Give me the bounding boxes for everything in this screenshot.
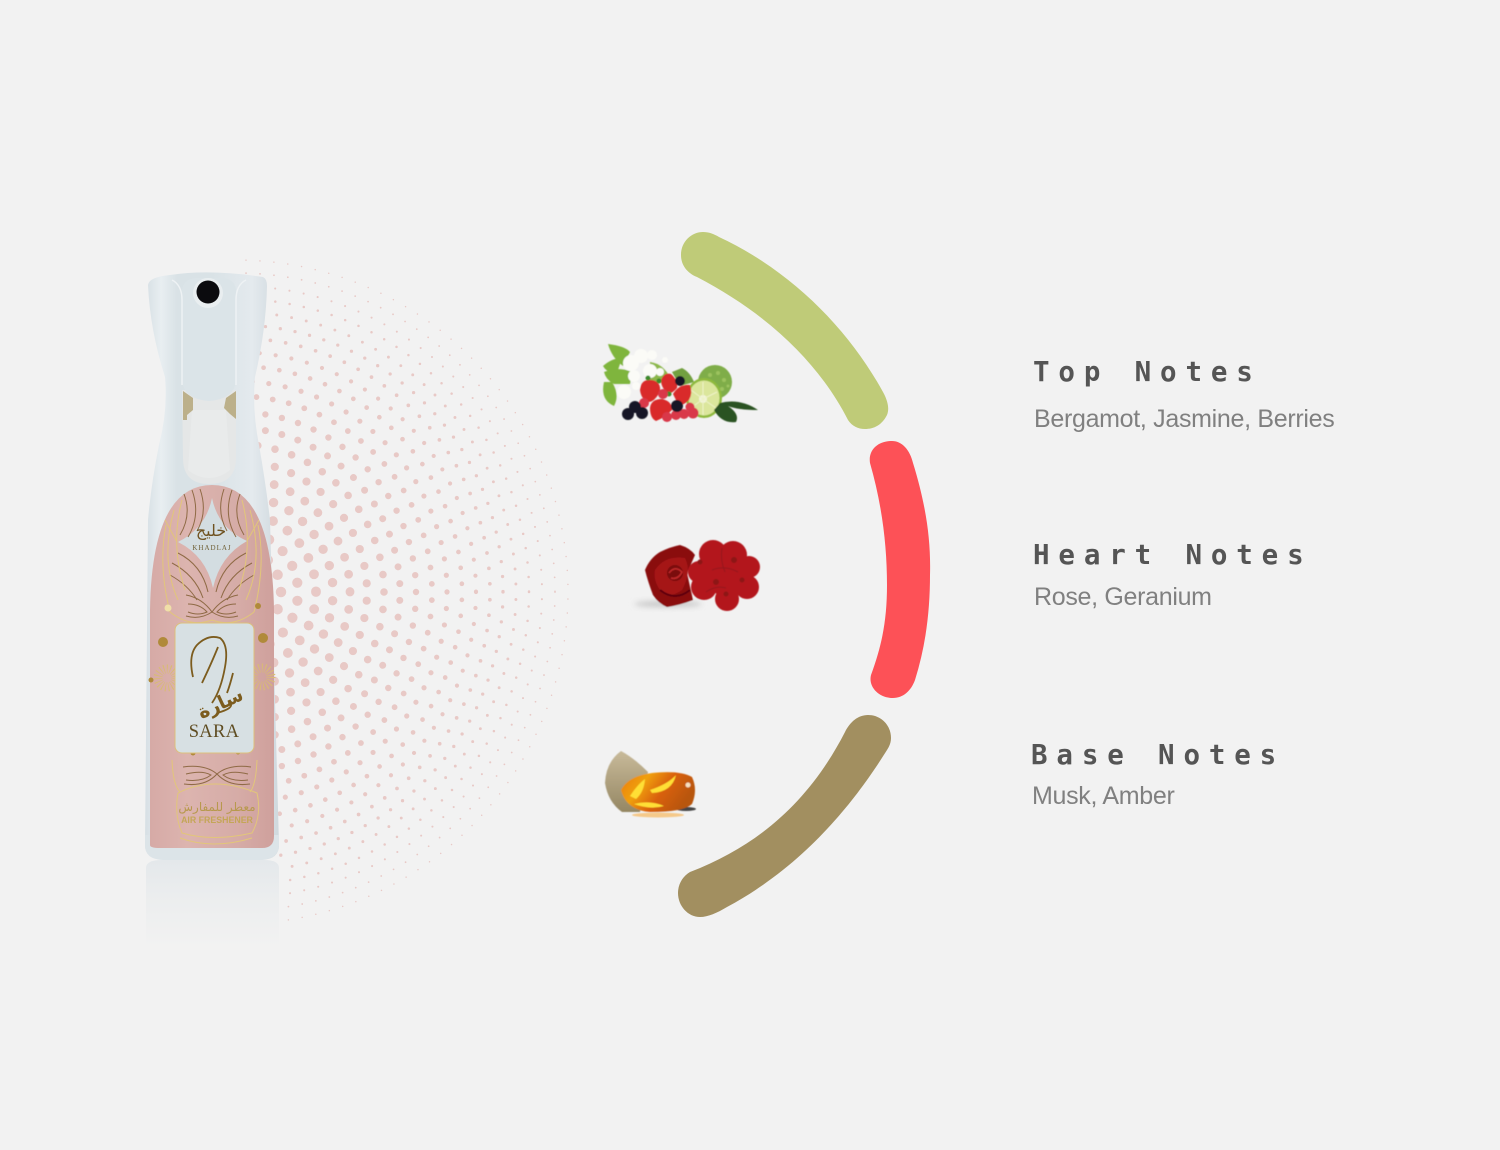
dark leaves [714, 402, 758, 422]
window highlights [172, 280, 246, 385]
Sara label panel [175, 623, 254, 753]
calligraphic loop [191, 637, 233, 713]
jasmine [617, 349, 668, 399]
fur tuft [605, 751, 648, 812]
icon: top notes fruit and flowers [603, 344, 758, 422]
bergamot [698, 365, 732, 399]
geranium [688, 540, 760, 611]
halftone dot semicircle [245, 260, 569, 921]
raspberries [639, 389, 698, 422]
heading: base notes: Base Notes [1031, 739, 1285, 771]
rose [645, 545, 695, 607]
text: top notes ingredients: Bergamot, Jasmine, Berries [1034, 405, 1334, 433]
shadow [634, 601, 702, 607]
heading: heart notes: Heart Notes [1033, 539, 1312, 571]
illustration layer [145, 232, 930, 921]
infographic canvas [145, 232, 1334, 921]
brand name: KHADLAJ [192, 544, 232, 552]
gold linework [163, 500, 261, 844]
bottle reflection [146, 860, 279, 948]
brand mark: خليج [196, 521, 226, 540]
lime slice [686, 378, 722, 418]
spray bottle [145, 272, 279, 860]
text: heart notes ingredients: Rose, Geranium [1034, 583, 1212, 611]
amber shadow [676, 807, 696, 811]
trigger [182, 278, 236, 401]
arabic product type: معطر للمفارش [178, 800, 256, 815]
arc: heart notes [870, 441, 930, 698]
brand diamond [178, 498, 247, 588]
icon: base notes musk and amber [605, 751, 696, 818]
text: base notes ingredients: Musk, Amber [1032, 782, 1174, 810]
gold tube glimpses [183, 391, 236, 420]
calligraphic name: سارة [194, 683, 247, 724]
nozzle [193, 278, 223, 308]
amber glow [632, 812, 684, 818]
leaves [603, 344, 632, 406]
gold sunbursts [158, 668, 271, 687]
sprayer lower window [182, 390, 236, 484]
amber stone [621, 772, 695, 812]
strawberries [640, 374, 691, 421]
pink label [150, 485, 274, 848]
blackberries [622, 376, 685, 420]
base ring [145, 835, 279, 860]
arc: top notes [681, 232, 888, 429]
inner tube [188, 410, 230, 478]
heading: top notes: Top Notes [1033, 356, 1262, 388]
calyx [646, 376, 672, 396]
icon: heart notes rose and geranium [634, 540, 760, 611]
brown linework [170, 489, 254, 785]
product name: SARA [189, 722, 240, 742]
arc: base notes [678, 715, 891, 917]
product type: AIR FRESHENER [181, 815, 254, 825]
bottle shell and sprayer head [145, 272, 279, 860]
gold ornaments [148, 603, 268, 756]
